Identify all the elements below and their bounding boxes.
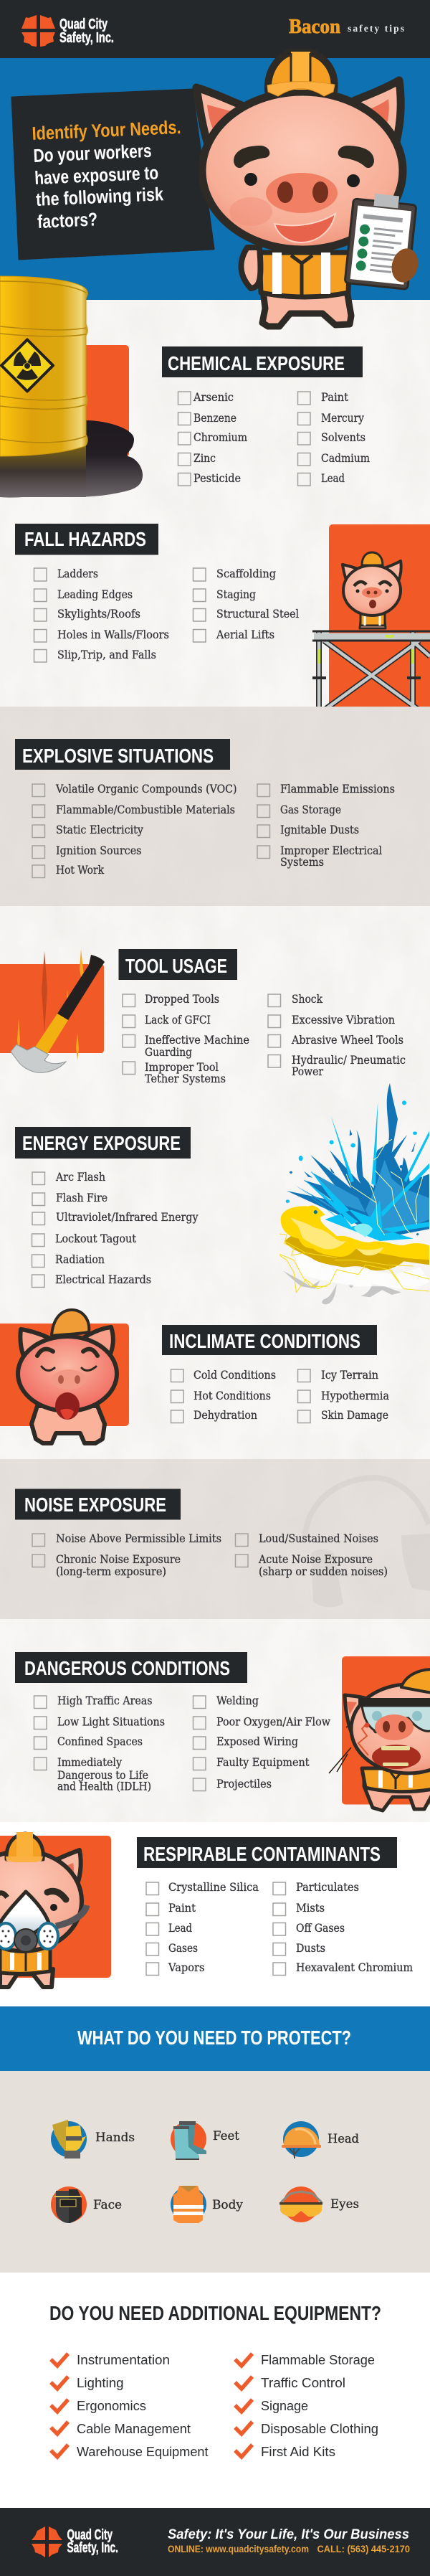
strap [56, 1905, 87, 1926]
crack lines [329, 1717, 371, 1773]
checklist: chemical exposure: Lead [321, 472, 345, 485]
footer logo [32, 2527, 62, 2557]
callout: identify your needs: the following risk [35, 183, 164, 210]
head [0, 1851, 82, 1951]
snout [375, 1714, 414, 1740]
checklist: noise exposure: Acute Noise Exposure [258, 1553, 373, 1566]
checklist: additional equipment: First Aid Kits [261, 2444, 335, 2459]
checklist: tool usage: Power [292, 1065, 324, 1078]
contact line: CALL: (563) 445-2170 [317, 2543, 410, 2554]
checklist: respirable contaminants: Hexavalent Chromium [296, 1961, 413, 1974]
checklist: respirable contaminants: Vapors [168, 1961, 205, 1974]
legs [262, 291, 351, 326]
yellow lightning [280, 1234, 429, 1293]
checklist: tool usage: Lack of GFCI [145, 1014, 211, 1027]
checklist: inclimate conditions: Cold Conditions [194, 1369, 276, 1382]
bacon safety tips: safety tips [348, 23, 404, 34]
checklist: chemical exposure: Arsenic [193, 391, 234, 404]
checklist: noise exposure: Chronic Noise Exposure [56, 1553, 181, 1566]
checklist: tool usage: Tether Systems [145, 1072, 226, 1085]
checklist: tool usage: Excessive Vibration [292, 1014, 395, 1027]
checklist: respirable contaminants: Lead [168, 1922, 192, 1935]
checklist: chemical exposure: Chromium [194, 431, 247, 444]
checklist: chemical exposure: Mercury [321, 412, 364, 425]
label: Head [328, 2132, 359, 2146]
checklist: explosive situations: Hot Work [56, 864, 105, 877]
checklist: fall hazards: Skylights/Roofs [57, 608, 140, 621]
callout: identify your needs [12, 90, 214, 259]
checklist: dangerous conditions: Faulty Equipment [216, 1756, 310, 1769]
callout: identify your needs: have exposure to [34, 161, 159, 189]
panel: protect icons [0, 2071, 430, 2273]
goggles [362, 1706, 430, 1732]
label: Hands [95, 2131, 135, 2144]
hat [52, 1310, 89, 1336]
checklist: explosive situations: Ignitable Dusts [280, 824, 359, 836]
left arm [241, 247, 261, 288]
checklist: respirable contaminants [146, 1881, 413, 1976]
checklist: explosive situations: Static Electricity [56, 824, 143, 836]
eyes [244, 173, 257, 186]
handle [57, 955, 105, 1020]
checklist: additional equipment: Lighting [77, 2375, 123, 2390]
snout [266, 173, 338, 213]
company name [59, 16, 114, 46]
checklist: noise exposure [32, 1532, 388, 1578]
footer company name: Safety, Inc. [67, 2540, 118, 2556]
checklist: inclimate conditions: Icy Terrain [321, 1369, 378, 1382]
checklist: fall hazards: Structural Steel [216, 608, 299, 621]
mask [0, 1892, 49, 1937]
dark flames [287, 1083, 429, 1239]
heading: fall hazards [15, 524, 158, 555]
checklist: inclimate conditions: Hypothermia [321, 1390, 389, 1402]
faint ear defenders [305, 1478, 430, 1607]
heading: noise exposure [15, 1489, 181, 1519]
oil puddle [0, 420, 143, 498]
checklist: energy exposure: Lockout Tagout [55, 1232, 137, 1245]
banner: what do you need to protect: WHAT DO YOU NEED TO PROTECT? [77, 2027, 351, 2049]
illustration: pig with respirator [0, 1832, 111, 1987]
gold highlight [290, 1217, 383, 1255]
checklist: respirable contaminants: Paint [168, 1902, 196, 1915]
checklist: dangerous conditions: Confined Spaces [57, 1735, 143, 1748]
mouth and tongue [55, 1392, 80, 1420]
illustration: pig on scaffold [312, 524, 430, 710]
checklist: tool usage: Improper Tool [145, 1061, 219, 1074]
icon: hands [51, 2120, 135, 2159]
panel: footer [0, 2508, 430, 2576]
company name: Safety, Inc. [59, 30, 114, 46]
checklist: chemical exposure [178, 391, 370, 486]
callout: identify your needs: factors? [37, 208, 98, 232]
checklist: additional equipment: Ergonomics [77, 2398, 146, 2413]
checklist: tool usage: Dropped Tools [145, 993, 219, 1006]
icon: body [171, 2186, 244, 2223]
checklist: inclimate conditions [171, 1369, 389, 1423]
checklist: explosive situations: Flammable/Combustible Materials [56, 803, 235, 816]
heading: dangerous conditions [15, 1652, 247, 1683]
ears [20, 1327, 113, 1359]
mid flames [296, 1160, 429, 1239]
heading: tool usage: TOOL USAGE [125, 955, 227, 977]
callout: identify your needs: Do your workers [33, 140, 152, 166]
heading: inclimate conditions: INCLIMATE CONDITIONS [169, 1330, 360, 1352]
checklist: explosive situations: Flammable Emissions [280, 783, 395, 796]
wound [358, 1723, 368, 1755]
hard hat [268, 52, 335, 91]
checklist: explosive situations: Systems [280, 856, 324, 869]
company name: Quad City [59, 16, 108, 32]
heading: inclimate conditions [162, 1325, 377, 1355]
brows and closed eyes [37, 1349, 97, 1356]
icon: face [51, 2186, 122, 2223]
checklist: additional equipment: Disposable Clothing [261, 2421, 378, 2436]
checklist: fall hazards: Holes in Walls/Floors [57, 628, 169, 641]
checklist: additional equipment [51, 2352, 378, 2459]
body [364, 1779, 430, 1811]
heading: dangerous conditions: DANGEROUS CONDITIONS [24, 1657, 230, 1679]
logo [22, 15, 55, 47]
callout: identify your needs: Identify Your Needs. [32, 116, 181, 144]
checklist: chemical exposure: Solvents [321, 431, 366, 444]
checklist: chemical exposure: Pesticide [194, 472, 241, 485]
panel: blue hero [0, 58, 430, 300]
checklist: respirable contaminants: Mists [296, 1902, 325, 1915]
droplets [286, 1100, 417, 1203]
heading: explosive situations [15, 739, 230, 770]
checklist: explosive situations: Ignition Sources [56, 844, 142, 857]
heading: explosive situations: EXPLOSIVE SITUATIONS [22, 745, 214, 767]
ear [345, 1695, 373, 1736]
checklist: noise exposure: (sharp or sudden noises) [259, 1565, 388, 1578]
hammer head [11, 1044, 66, 1072]
checklist: tool usage: Abrasive Wheel Tools [291, 1034, 403, 1047]
gold cloud [281, 1206, 429, 1260]
checklist: tool usage: Hydraulic/ Pneumatic [292, 1054, 406, 1067]
panel: header bar [0, 0, 430, 58]
icon: feet [171, 2121, 239, 2160]
heading: energy exposure: ENERGY EXPOSURE [22, 1132, 181, 1154]
checklist: respirable contaminants: Gases [168, 1942, 198, 1955]
head [18, 1336, 117, 1411]
checklist: chemical exposure: Zinc [194, 452, 216, 465]
checklist: additional equipment: Flammable Storage [261, 2352, 375, 2367]
checklist: dangerous conditions: Immediately [57, 1756, 122, 1769]
checklist: additional equipment: Signage [261, 2398, 308, 2413]
checklist: tool usage: Shock [292, 993, 323, 1006]
footer company name: Quad City [67, 2527, 113, 2543]
checklist: additional equipment: Traffic Control [261, 2375, 345, 2390]
bacon safety tips [289, 15, 404, 38]
heading: tool usage [119, 949, 237, 980]
small pig [360, 613, 386, 628]
bacon safety tips: Bacon [289, 15, 340, 38]
illustration: electric blast [280, 1083, 429, 1304]
checklist: dangerous conditions: Low Light Situations [57, 1716, 165, 1729]
illustration: pig with goggles [329, 1656, 430, 1811]
checklist: chemical exposure: Benzene [194, 412, 236, 425]
checklist: tool usage: Guarding [145, 1046, 192, 1059]
checklist: fall hazards: Aerial Lifts [216, 628, 274, 641]
panel: noise exposure band [0, 1459, 430, 1619]
tagline: Safety: It's Your Life, It's Our Business [168, 2527, 409, 2542]
checklist: dangerous conditions: Poor Oxygen/Air Flow [216, 1716, 331, 1729]
glow [354, 1224, 373, 1237]
clipboard [345, 192, 417, 289]
checklist: tool usage [123, 993, 406, 1085]
icon: eyes [280, 2186, 359, 2222]
checklist: noise exposure: Loud/Sustained Noises [259, 1532, 378, 1545]
head [202, 92, 403, 250]
label: Face [93, 2198, 122, 2212]
checklist: fall hazards: Slip,Trip, and Falls [57, 648, 156, 661]
feet and vest [0, 1969, 53, 1987]
vest [259, 253, 350, 297]
checklist: noise exposure: (long-term exposure) [56, 1565, 166, 1578]
checklist: energy exposure: Arc Flash [55, 1171, 105, 1184]
checklist: energy exposure [32, 1171, 199, 1287]
heading: energy exposure [15, 1127, 191, 1159]
label: Feet [213, 2129, 239, 2143]
checklist: respirable contaminants: Off Gases [296, 1922, 345, 1935]
checklist: energy exposure: Radiation [55, 1253, 105, 1266]
checklist: chemical exposure: Paint [321, 391, 349, 404]
checklist: dangerous conditions: Projectiles [216, 1778, 272, 1791]
footer company name [67, 2527, 118, 2556]
checklist: dangerous conditions: Welding [216, 1694, 259, 1707]
contact line [168, 2543, 410, 2554]
checklist: explosive situations: Gas Storage [280, 803, 341, 816]
checklist: fall hazards: Staging [216, 588, 256, 601]
brow and eye [47, 1891, 66, 1900]
illustration: overheated pig [0, 1310, 129, 1443]
checklist: dangerous conditions: Dangerous to Life [57, 1769, 148, 1782]
checklist: dangerous conditions: High Traffic Areas [57, 1694, 153, 1707]
paper texture: upper [0, 300, 430, 1822]
checklist: respirable contaminants: Particulates [296, 1881, 359, 1894]
open mouth [372, 1745, 421, 1769]
body [32, 1406, 105, 1443]
checklist: noise exposure: Noise Above Permissible Limits [56, 1532, 221, 1545]
grey debris [283, 1271, 401, 1304]
checklist: respirable contaminants: Dusts [296, 1942, 325, 1955]
checklist: energy exposure: Electrical Hazards [55, 1273, 151, 1286]
checklist: dangerous conditions [34, 1694, 331, 1793]
label: Body [212, 2198, 244, 2212]
checklist: energy exposure: Ultraviolet/Infrared Energy [56, 1211, 199, 1224]
heading: fall hazards: FALL HAZARDS [24, 528, 146, 550]
checklist: inclimate conditions: Skin Damage [321, 1409, 388, 1422]
checklist: inclimate conditions: Hot Conditions [194, 1390, 271, 1402]
illustration: pig mascot with clipboard [196, 52, 422, 326]
checklist: dangerous conditions: and Health (IDLH) [57, 1780, 151, 1793]
heading: respirable contaminants [137, 1837, 397, 1868]
scaffold [312, 631, 430, 710]
checklist: respirable contaminants: Crystalline Silica [168, 1881, 259, 1894]
checklist: explosive situations: Volatile Organic Compounds (VOC) [55, 783, 236, 796]
checklist: explosive situations: Improper Electrical [280, 844, 382, 857]
banner: what do you need to protect [0, 2006, 430, 2071]
heading: chemical exposure [162, 346, 363, 377]
heading: chemical exposure: CHEMICAL EXPOSURE [168, 352, 345, 374]
eyebrows [234, 146, 374, 168]
ear [54, 1850, 81, 1894]
icon: head [282, 2121, 359, 2159]
mouth [274, 214, 335, 242]
checklist: fall hazards: Ladders [57, 567, 98, 580]
illustration: hammer [0, 949, 105, 1072]
hat [6, 1834, 43, 1859]
checklist: inclimate conditions: Dehydration [194, 1409, 257, 1422]
hat [401, 1669, 430, 1693]
snout [52, 1369, 86, 1390]
cyan spikes [292, 1101, 429, 1241]
hand [388, 245, 422, 286]
panel: chemical illustration [0, 276, 143, 498]
heading: noise exposure: NOISE EXPOSURE [24, 1494, 166, 1516]
barrel [0, 276, 87, 456]
panel: explosive situations band [0, 707, 430, 906]
contact line: ONLINE: www.quadcitysafety.com [168, 2543, 309, 2554]
ears [196, 80, 401, 154]
checklist: fall hazards: Scaffolding [216, 567, 276, 580]
label: Eyes [330, 2197, 359, 2211]
white lower area [0, 1822, 430, 2576]
checklist: fall hazards: Leading Edges [57, 588, 133, 601]
head [351, 1684, 430, 1773]
radiation diamond [1, 340, 53, 392]
checklist: fall hazards [34, 567, 299, 662]
checklist: chemical exposure: Cadmium [321, 452, 370, 465]
pale lightning [346, 1139, 423, 1235]
checklist: dangerous conditions: Exposed Wiring [216, 1735, 298, 1748]
checklist: explosive situations [32, 783, 395, 878]
checklist: tool usage: Ineffective Machine [145, 1034, 249, 1047]
checklist: additional equipment: Instrumentation [77, 2352, 170, 2367]
gold cloud shadow [285, 1234, 429, 1270]
checklist: energy exposure: Flash Fire [56, 1192, 108, 1204]
checklist: additional equipment: Warehouse Equipment [77, 2444, 208, 2459]
checklist: additional equipment: Cable Management [77, 2421, 191, 2436]
